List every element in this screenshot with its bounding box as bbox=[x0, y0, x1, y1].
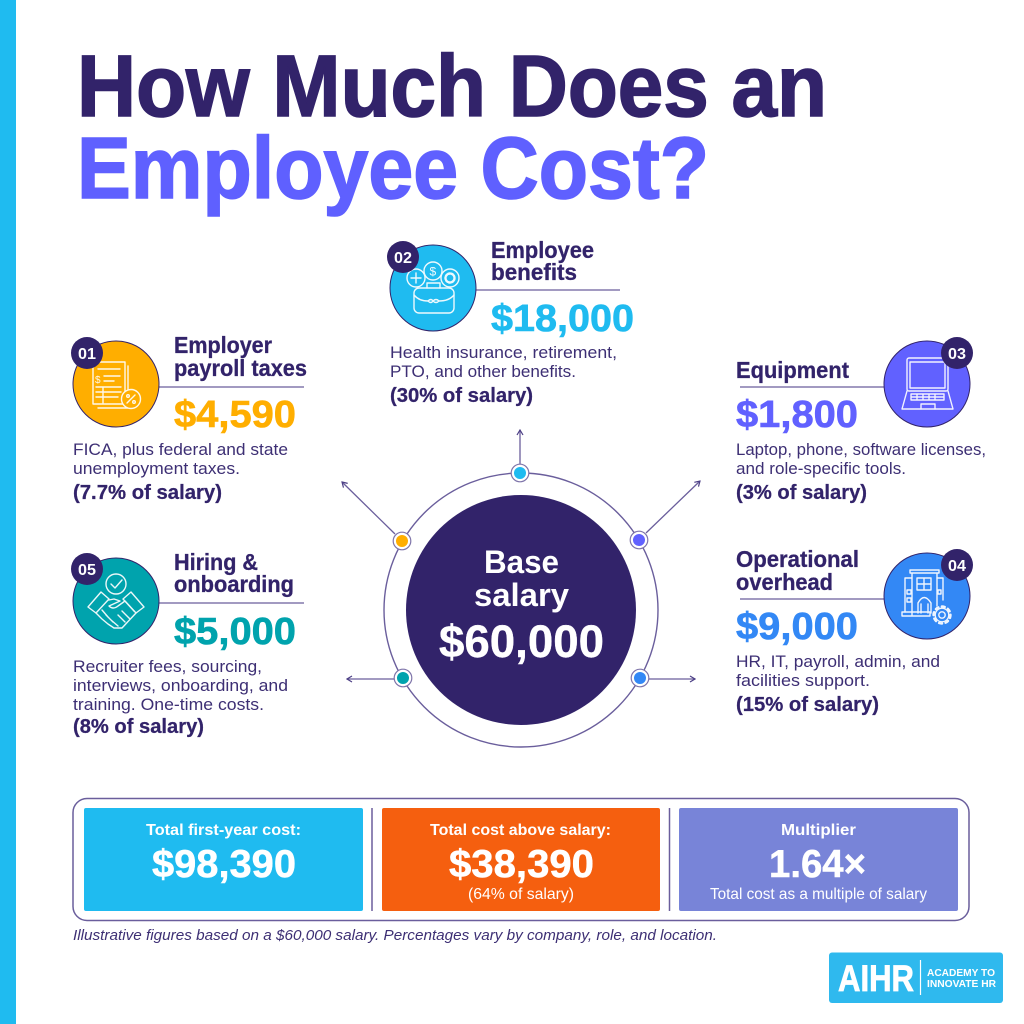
ring nodes bbox=[393, 464, 649, 687]
description: unemployment taxes. bbox=[73, 459, 240, 478]
description bbox=[390, 343, 617, 381]
description: and role-specific tools. bbox=[736, 459, 906, 478]
description: interviews, onboarding, and bbox=[73, 676, 288, 695]
heading bbox=[491, 237, 594, 285]
panel 04: operational overhead: 04 bbox=[948, 558, 966, 575]
panel 05: hiring and onboarding bbox=[71, 549, 304, 738]
card: total first-year cost: $98,390 bbox=[152, 843, 296, 886]
central diagram: base salary bbox=[342, 430, 700, 747]
heading: Hiring & bbox=[174, 549, 258, 575]
icon: tax document bbox=[93, 362, 140, 408]
description bbox=[73, 657, 288, 714]
description: Health insurance, retirement, bbox=[390, 343, 617, 362]
heading bbox=[736, 546, 859, 595]
description bbox=[736, 440, 986, 478]
percentage: (30% of salary) bbox=[390, 385, 533, 407]
panel 03: equipment bbox=[736, 337, 986, 504]
amount: $5,000 bbox=[174, 611, 296, 653]
amount: $18,000 bbox=[491, 298, 634, 340]
arrows from ring bbox=[342, 430, 700, 679]
heading bbox=[174, 332, 307, 381]
heading bbox=[174, 549, 294, 597]
title bbox=[77, 38, 827, 217]
description: Laptop, phone, software licenses, bbox=[736, 440, 986, 459]
base salary text: salary bbox=[474, 577, 569, 613]
description bbox=[73, 440, 288, 478]
description: PTO, and other benefits. bbox=[390, 362, 576, 381]
heading: Employer bbox=[174, 332, 272, 358]
logo: AIHR: AIHR bbox=[838, 958, 914, 999]
percentage: (3% of salary) bbox=[736, 482, 867, 504]
card: multiplier: Total cost as a multiple of salary bbox=[710, 886, 927, 903]
title: Employee Cost? bbox=[77, 120, 709, 217]
base salary text: $60,000 bbox=[439, 616, 604, 667]
panel 05: hiring and onboarding: 05 bbox=[78, 562, 96, 579]
heading: Equipment bbox=[736, 357, 849, 383]
heading: overhead bbox=[736, 569, 833, 595]
base salary text: Base bbox=[484, 544, 559, 580]
heading: benefits bbox=[491, 259, 577, 285]
card: multiplier bbox=[679, 808, 958, 911]
card: total first-year cost bbox=[84, 808, 363, 911]
footnote: Illustrative figures based on a $60,000 salary. Percentages vary by company, role, and location. bbox=[73, 927, 717, 944]
description: HR, IT, payroll, admin, and bbox=[736, 652, 940, 671]
card: multiplier: Multiplier bbox=[781, 822, 856, 839]
logo: AIHR: ACADEMY TO bbox=[927, 967, 995, 979]
panel 01: employer payroll taxes bbox=[71, 332, 307, 504]
icon: benefits briefcase: $ bbox=[430, 264, 436, 278]
logo: AIHR bbox=[829, 952, 1003, 1003]
heading: payroll taxes bbox=[174, 355, 307, 381]
card: multiplier: 1.64× bbox=[769, 843, 866, 886]
heading: Operational bbox=[736, 546, 859, 572]
icon: handshake with check bbox=[88, 574, 144, 628]
percentage: (7.7% of salary) bbox=[73, 482, 222, 504]
description: Recruiter fees, sourcing, bbox=[73, 657, 262, 676]
amount: $4,590 bbox=[174, 394, 296, 436]
description bbox=[736, 652, 940, 690]
card: total cost above salary: Total cost above salary: bbox=[430, 822, 611, 839]
description: facilities support. bbox=[736, 671, 870, 690]
icon: tax document: $ bbox=[95, 375, 101, 386]
panel 02: employee benefits: 02 bbox=[394, 250, 412, 267]
panel 02: employee benefits bbox=[387, 237, 634, 407]
icon: benefits briefcase bbox=[407, 262, 459, 313]
amount: $9,000 bbox=[736, 606, 858, 648]
percentage: (8% of salary) bbox=[73, 716, 204, 738]
logo: AIHR: INNOVATE HR bbox=[927, 978, 996, 990]
card: total cost above salary: $38,390 bbox=[449, 843, 594, 886]
panel 03: equipment: 03 bbox=[948, 346, 966, 363]
summary bar bbox=[73, 798, 969, 920]
card: total cost above salary: (64% of salary) bbox=[468, 886, 574, 903]
card: total first-year cost: Total first-year cost: bbox=[146, 822, 301, 839]
panel 04: operational overhead bbox=[736, 546, 973, 716]
heading: Employee bbox=[491, 237, 594, 263]
heading: onboarding bbox=[174, 571, 294, 597]
description: FICA, plus federal and state bbox=[73, 440, 288, 459]
description: training. One-time costs. bbox=[73, 695, 264, 714]
title: How Much Does an bbox=[77, 38, 827, 135]
card: total cost above salary bbox=[382, 808, 660, 911]
left accent bar bbox=[0, 0, 16, 1024]
percentage: (15% of salary) bbox=[736, 694, 879, 716]
base salary text bbox=[439, 544, 604, 667]
icon: laptop bbox=[902, 358, 953, 409]
amount: $1,800 bbox=[736, 394, 858, 436]
icon: building with gear bbox=[902, 570, 952, 625]
panel 01: employer payroll taxes: 01 bbox=[78, 346, 96, 363]
